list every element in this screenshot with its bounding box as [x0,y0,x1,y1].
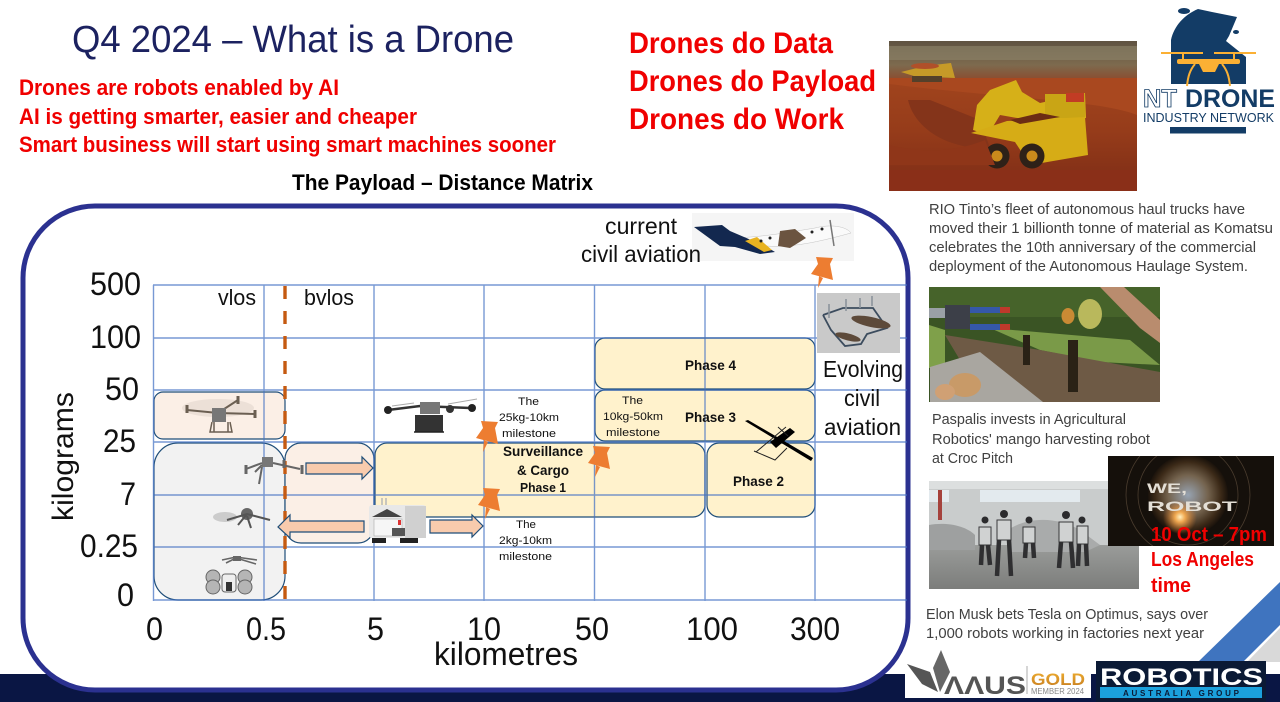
logo: nt drone industry network: DRONE [1185,85,1275,113]
note: 2kg-10km milestone [499,519,552,563]
label: surveillance and cargo phase 1: Phase 1 [520,480,566,495]
icon: milestone pin 25kg-10km [476,421,498,452]
note: 10kg-50km milestone: 10kg-50km [603,411,663,423]
label: surveillance and cargo phase 1 [503,443,583,495]
icon: fixed wing vtol drone [745,420,813,461]
y axis values: 7 [120,476,136,512]
label: evolving civil aviation: Evolving [823,356,903,382]
title: Q4 2024 – What is a Drone [72,19,514,61]
y axis values: 100 [90,319,141,355]
x axis values [146,611,840,647]
label: phase 3: Phase 3 [685,409,736,425]
arrow: back to vlos [278,515,364,538]
label: current civil aviation: current [605,213,678,239]
label: current civil aviation [581,213,701,267]
vlos boundary dashed line [283,286,287,601]
logo: nt drone industry network: NT [1143,85,1177,113]
caption: rio tinto [929,202,1273,275]
text block: drones do: Drones do Payload [629,65,876,98]
logo: robotics australia group [1096,661,1266,702]
logo: aaus gold member: ΛΛUS [944,672,1026,700]
logo: aaus gold member: GOLD [1031,670,1085,689]
note: 2kg-10km milestone: 2kg-10km [499,535,552,547]
y axis values: 0 [117,577,134,613]
note: 25kg-10km milestone: The [518,396,539,408]
note: 10kg-50km milestone [603,395,663,439]
region: phase 4 [595,338,815,389]
note: 25kg-10km milestone [499,396,559,440]
text block: drones are robots: Smart business will start using smart machines sooner [19,132,556,157]
chart heading: The Payload – Distance Matrix [292,170,594,195]
caption: rio tinto: moved their 1 billionth tonne of material as Komatsu [929,221,1273,237]
icon: delivery drone with cargo [384,399,477,432]
label: surveillance and cargo phase 1: & Cargo [517,462,569,478]
caption: elon musk [926,607,1208,642]
y axis values [80,266,141,613]
panel: payload distance matrix [23,206,908,690]
callout: event date [1151,524,1267,597]
caption: paspalis [932,412,1150,467]
image: mango harvesting robot [929,287,1160,402]
x axis values: 5 [367,611,384,647]
logo: robotics australia group: ROBOTICS [1100,664,1263,691]
icon: milestone pin current civil aviation [811,257,833,288]
icon: agricultural drone [182,396,255,432]
icon: enterprise drone [246,457,302,484]
label: evolving civil aviation: aviation [824,414,901,440]
image: we robot event: ROBOT [1147,498,1238,514]
logo: nt drone industry network [1143,8,1275,134]
text block: drones do: Drones do Work [629,103,844,136]
note: 2kg-10km milestone: milestone [499,551,552,563]
callout: event date: 10 Oct – 7pm [1151,524,1267,546]
background corner stripes [1198,582,1280,662]
y axis title: kilograms [47,392,80,521]
region: vlos light drones box [154,443,285,600]
zone label: vlos: vlos [218,285,256,310]
note: 10kg-50km milestone: The [622,395,643,407]
x axis values: 0 [146,611,163,647]
caption: elon musk: 1,000 robots working in factories next year [926,626,1204,642]
icon: drone dock station [369,498,426,543]
logo: robotics australia group: AUSTRALIA GROUP [1123,689,1240,698]
x axis values: 10 [467,611,501,647]
label: evolving civil aviation [823,356,903,440]
caption: paspalis: Robotics' mango harvesting robot [932,432,1150,448]
text block: drones do: Drones do Data [629,27,833,60]
note: 2kg-10km milestone: The [516,519,536,531]
footer bar [0,674,1280,702]
y axis values: 500 [90,266,141,302]
x axis values: 100 [686,611,738,647]
callout: event date: time [1151,575,1191,597]
label: phase 2: Phase 2 [733,473,784,489]
logo: aaus gold member: MEMBER 2024 [1031,687,1085,696]
arrow: into phase 1 [306,457,373,479]
caption: rio tinto: celebrates the 10th anniversary of the commercial [929,240,1256,256]
image: autonomous haul trucks at mine [889,41,1137,191]
caption: paspalis: Paspalis invests in Agricultural [932,412,1126,428]
x axis values: 50 [575,611,609,647]
text block: drones do [629,27,876,136]
note: 25kg-10km milestone: 25kg-10km [499,412,559,424]
label: surveillance and cargo phase 1: Surveillance [503,443,583,459]
label: evolving civil aviation: civil [844,385,880,411]
image: evolving civil aircraft evtol [817,293,900,353]
icon: milestone pin 2kg-10km [478,488,500,519]
note: 25kg-10km milestone: milestone [502,428,556,440]
logo: aaus gold member [905,648,1091,700]
note: 10kg-50km milestone: milestone [606,427,660,439]
image: we robot event [1108,456,1274,546]
caption: rio tinto: RIO Tinto’s fleet of autonomous haul trucks have [929,202,1245,218]
y axis values: 50 [105,371,139,407]
icon: ducted fpv drone [206,570,252,594]
logo: nt drone industry network: INDUSTRY NETWORK [1143,111,1275,125]
region: bvlos transition box [285,443,374,543]
region: phase 3 [595,390,815,441]
text block: drones are robots [19,75,556,157]
region: phase 2 [707,443,815,517]
x axis values: 300 [790,611,840,647]
icon: small folding drone [222,556,257,564]
region: surveillance and cargo phase 1 [375,443,705,517]
image: tesla optimus robots [929,481,1139,589]
y axis values: 0.25 [80,528,138,564]
x axis title: kilometres [434,636,578,672]
label: current civil aviation: civil aviation [581,241,701,267]
region: vlos heavy lift box [154,392,285,439]
caption: rio tinto: deployment of the Autonomous Haulage System. [929,259,1248,275]
caption: elon musk: Elon Musk bets Tesla on Optimus, says over [926,607,1208,623]
icon: mavic drone [213,508,270,528]
text block: drones are robots: Drones are robots enabled by AI [19,75,339,100]
caption: paspalis: at Croc Pitch [932,451,1013,467]
x axis values: 0.5 [246,611,286,647]
icon: milestone pin 10kg-50km [588,446,610,477]
arrow: dock to 10km [430,515,483,537]
image: we robot event: WE, [1147,480,1187,496]
zone label: bvlos: bvlos [304,285,354,310]
y axis values: 25 [103,423,136,459]
text block: drones are robots: AI is getting smarter, easier and cheaper [19,104,417,129]
label: phase 4: Phase 4 [685,357,736,373]
panel border [23,206,908,690]
image: current civil aircraft [692,213,854,261]
callout: event date: Los Angeles [1151,549,1254,571]
